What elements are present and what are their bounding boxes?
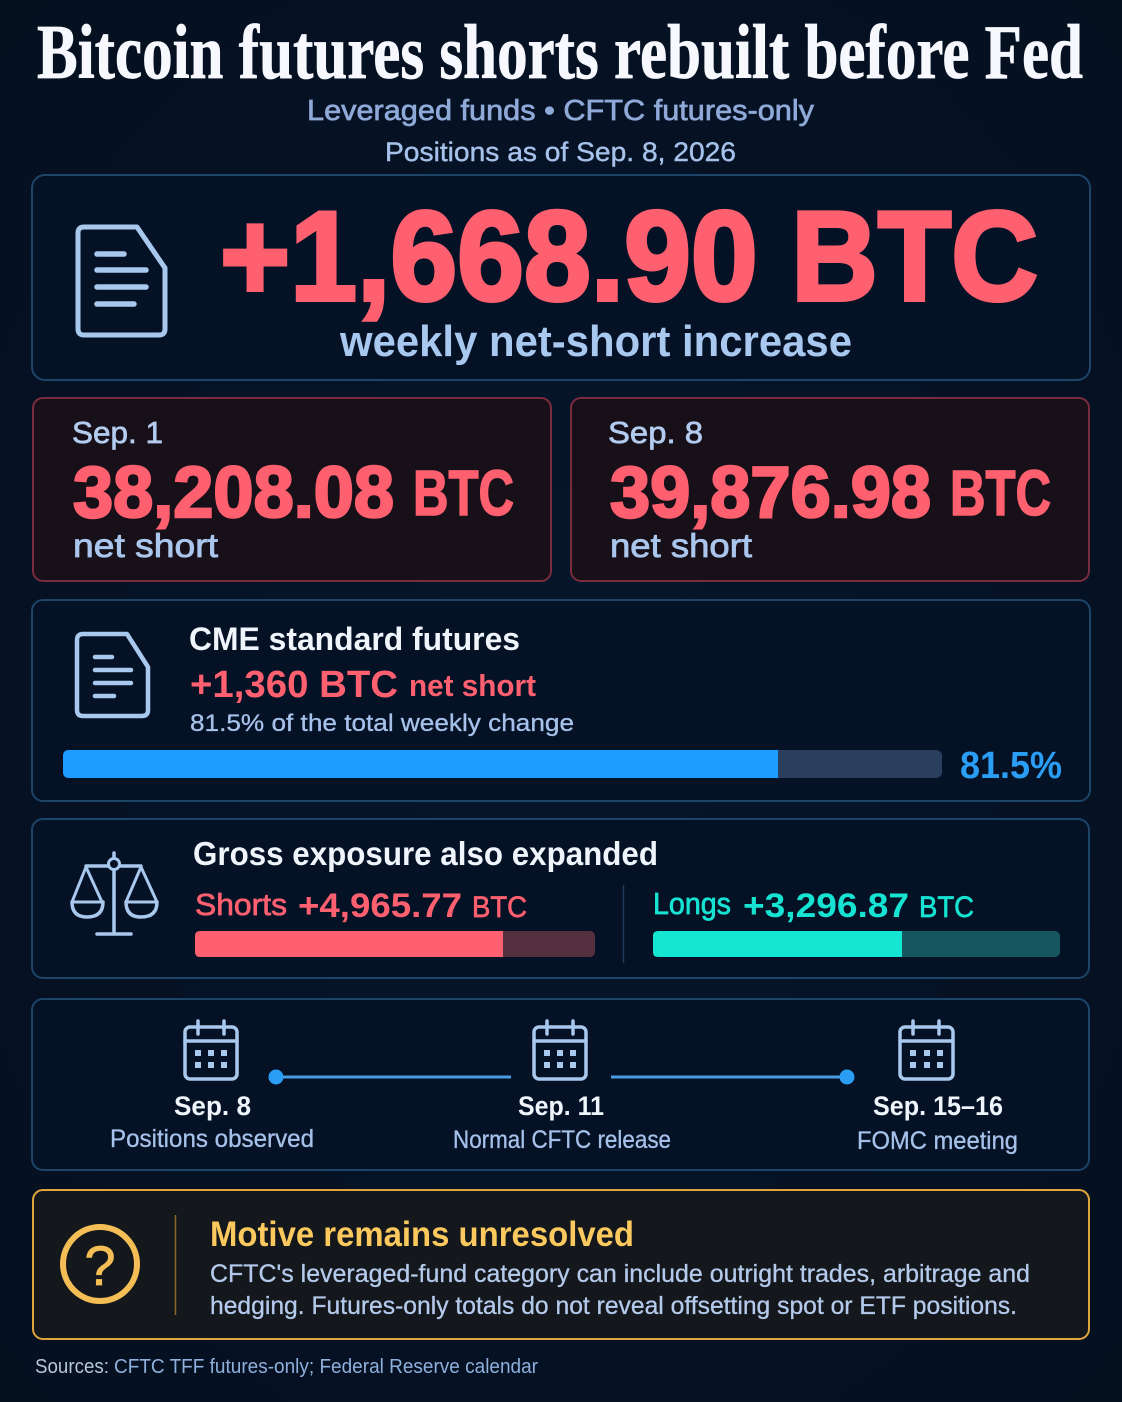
icon: scales (72, 853, 157, 934)
value suffix: net short (409, 668, 536, 703)
sources: CFTC TFF futures-only; Federal Reserve calendar (114, 1356, 538, 1378)
timeline connector (268, 1070, 854, 1084)
bar value: 81.5% (960, 745, 1062, 787)
milestone: Sep. 11 (453, 1091, 671, 1154)
longs label (653, 886, 974, 925)
panel: Sep. 8 (571, 398, 1089, 581)
longs bar (653, 931, 1060, 957)
milestone: Sep. 8 (110, 1091, 314, 1153)
date label: Sep. 1 (72, 415, 163, 450)
milestone: Sep. 11: Normal CFTC release (453, 1126, 671, 1154)
caption: weekly net-short increase (339, 317, 852, 366)
milestone: Sep. 15–16 (857, 1091, 1018, 1155)
panel: weekly net-short increase (32, 175, 1090, 380)
icon: calendar (900, 1021, 953, 1079)
sources: Sources: (35, 1356, 109, 1378)
milestone: Sep. 8: Sep. 8 (174, 1091, 251, 1121)
longs label: +3,296.87 (743, 887, 909, 925)
icon: document (78, 227, 165, 335)
value: +1,360 BTC (190, 664, 398, 706)
icon: question mark: ? (84, 1234, 116, 1297)
unit: BTC (950, 457, 1051, 529)
panel: Sep. 1 (33, 398, 551, 581)
milestone: Sep. 15–16: Sep. 15–16 (873, 1091, 1003, 1121)
shorts bar (195, 931, 595, 957)
longs label: Longs (653, 886, 731, 921)
milestone: Sep. 11: Sep. 11 (518, 1091, 604, 1121)
icon: calendar (534, 1021, 586, 1079)
unit: BTC (413, 457, 514, 529)
subtitle: Leveraged funds • CFTC futures-only (307, 95, 815, 127)
panel: gross exposure (32, 819, 1089, 978)
panel: CME standard futures (32, 600, 1090, 801)
shorts label: BTC (472, 891, 527, 924)
note: 81.5% of the total weekly change (190, 710, 574, 737)
callout body: CFTC's leveraged-fund category can include outright trades, arbitrage and (210, 1260, 1030, 1288)
shorts label (195, 887, 527, 925)
big number: +1,668.90 BTC (220, 185, 1038, 327)
heading: CME standard futures (189, 621, 520, 657)
icon: calendar (185, 1021, 237, 1079)
shorts label: Shorts (195, 887, 287, 922)
value: 39,876.98 (610, 453, 931, 533)
milestone: Sep. 15–16: FOMC meeting (857, 1127, 1018, 1155)
icon: document (77, 634, 148, 716)
longs label: BTC (919, 891, 974, 924)
caption: net short (610, 527, 752, 564)
panel: timeline (32, 999, 1089, 1170)
callout body (210, 1260, 1030, 1320)
icon: question mark (63, 1227, 137, 1301)
shorts label: +4,965.77 (298, 887, 462, 925)
callout body: hedging. Futures-only totals do not reveal offsetting spot or ETF positions. (210, 1292, 1017, 1320)
milestone: Sep. 8: Positions observed (110, 1125, 314, 1153)
progress bar (63, 750, 942, 778)
caption: net short (73, 527, 218, 564)
callout: motive unresolved (33, 1190, 1089, 1339)
value: 38,208.08 (73, 453, 394, 533)
heading: Gross exposure also expanded (193, 835, 658, 872)
date line: Positions as of Sep. 8, 2026 (385, 137, 736, 167)
date label: Sep. 8 (608, 415, 703, 450)
callout heading: Motive remains unresolved (210, 1215, 634, 1254)
